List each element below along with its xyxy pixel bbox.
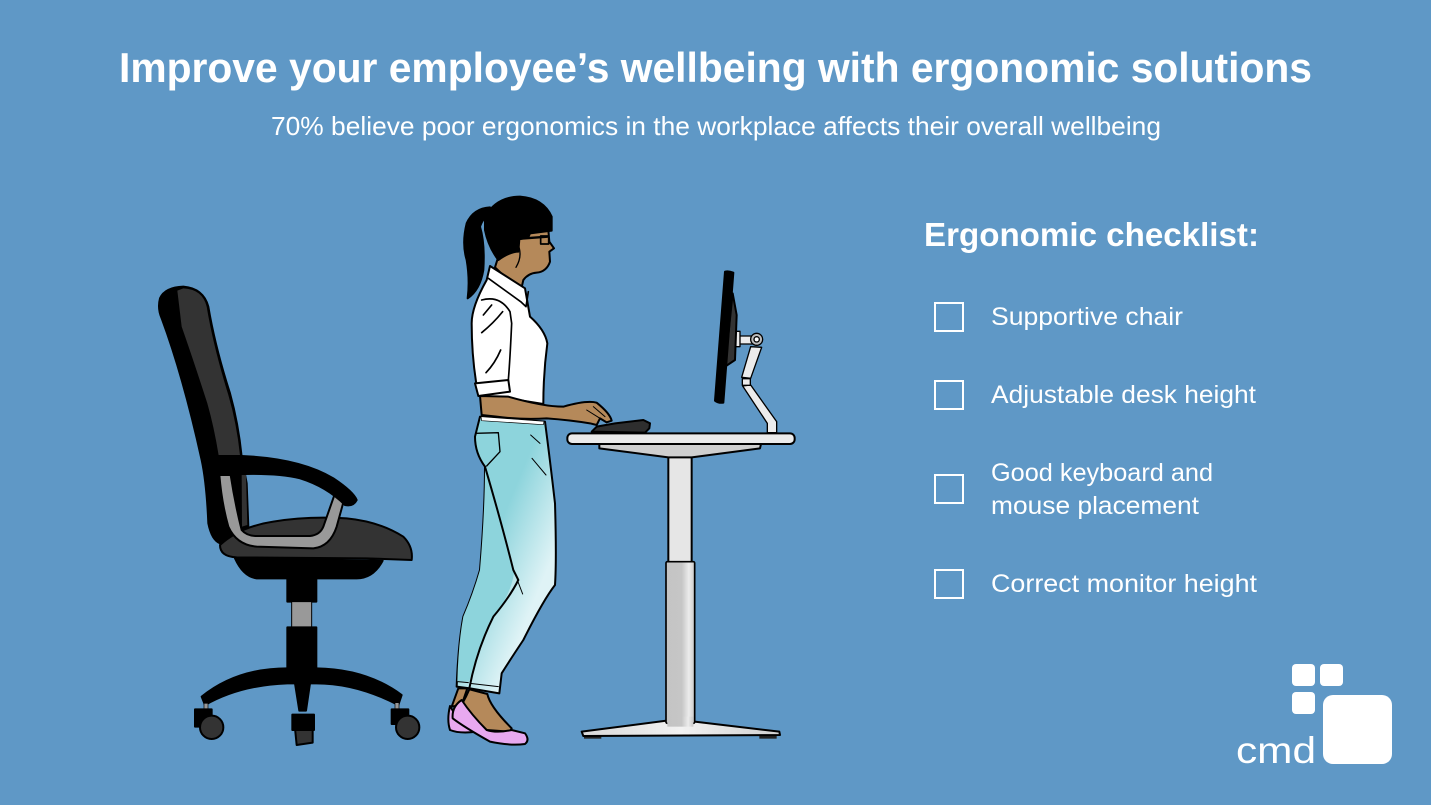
desk underside [599,444,761,457]
logo: cmd [1236,664,1392,771]
checklist item: supportive chair: Supportive chair [991,303,1183,331]
woman lower body [448,417,556,745]
monitor arm [734,331,777,433]
chair seat [220,518,412,560]
desk foot [582,721,780,739]
title: Improve your employee’s wellbeing with ergonomic solutions [119,44,1312,91]
logo: cmd: cmd [1236,730,1316,771]
woman upper body [464,197,612,425]
checklist item: keyboard and mouse placement: mouse placement [991,492,1199,520]
illustration: standing desk with monitor [567,271,795,739]
checklist item: keyboard and mouse placement: Good keyboard and [991,459,1213,487]
monitor [715,271,737,403]
checklist item: keyboard and mouse placement [935,459,1213,520]
checklist heading: Ergonomic checklist: [924,216,1259,253]
checklist item: correct monitor height: Correct monitor height [991,570,1257,598]
front foot [457,689,512,732]
desk top [567,433,795,444]
chair arm support [219,475,344,548]
illustration: woman standing [448,197,612,745]
jeans [457,417,556,693]
arm [480,396,612,425]
shirt collar and folds [482,278,528,380]
ponytail [464,207,490,298]
sleeve cuff [475,380,510,396]
checklist item: adjustable desk height: Adjustable desk height [991,381,1256,409]
shirt [472,266,547,404]
shoe [453,700,527,745]
glasses [520,236,549,244]
waistband [481,417,544,425]
subtitle: 70% believe poor ergonomics in the workplace affects their overall wellbeing [271,111,1161,141]
keyboard [592,420,650,433]
chair armrest [218,456,357,505]
desk column [666,457,695,727]
illustration: office chair [159,287,419,745]
chair back [159,287,248,543]
face and neck [495,230,554,292]
hair [485,197,552,260]
earring [516,243,520,267]
finger lines [587,407,605,418]
rear foot [448,688,477,733]
jeans seams [458,433,546,688]
rear leg [457,467,514,682]
chair base [195,558,419,745]
